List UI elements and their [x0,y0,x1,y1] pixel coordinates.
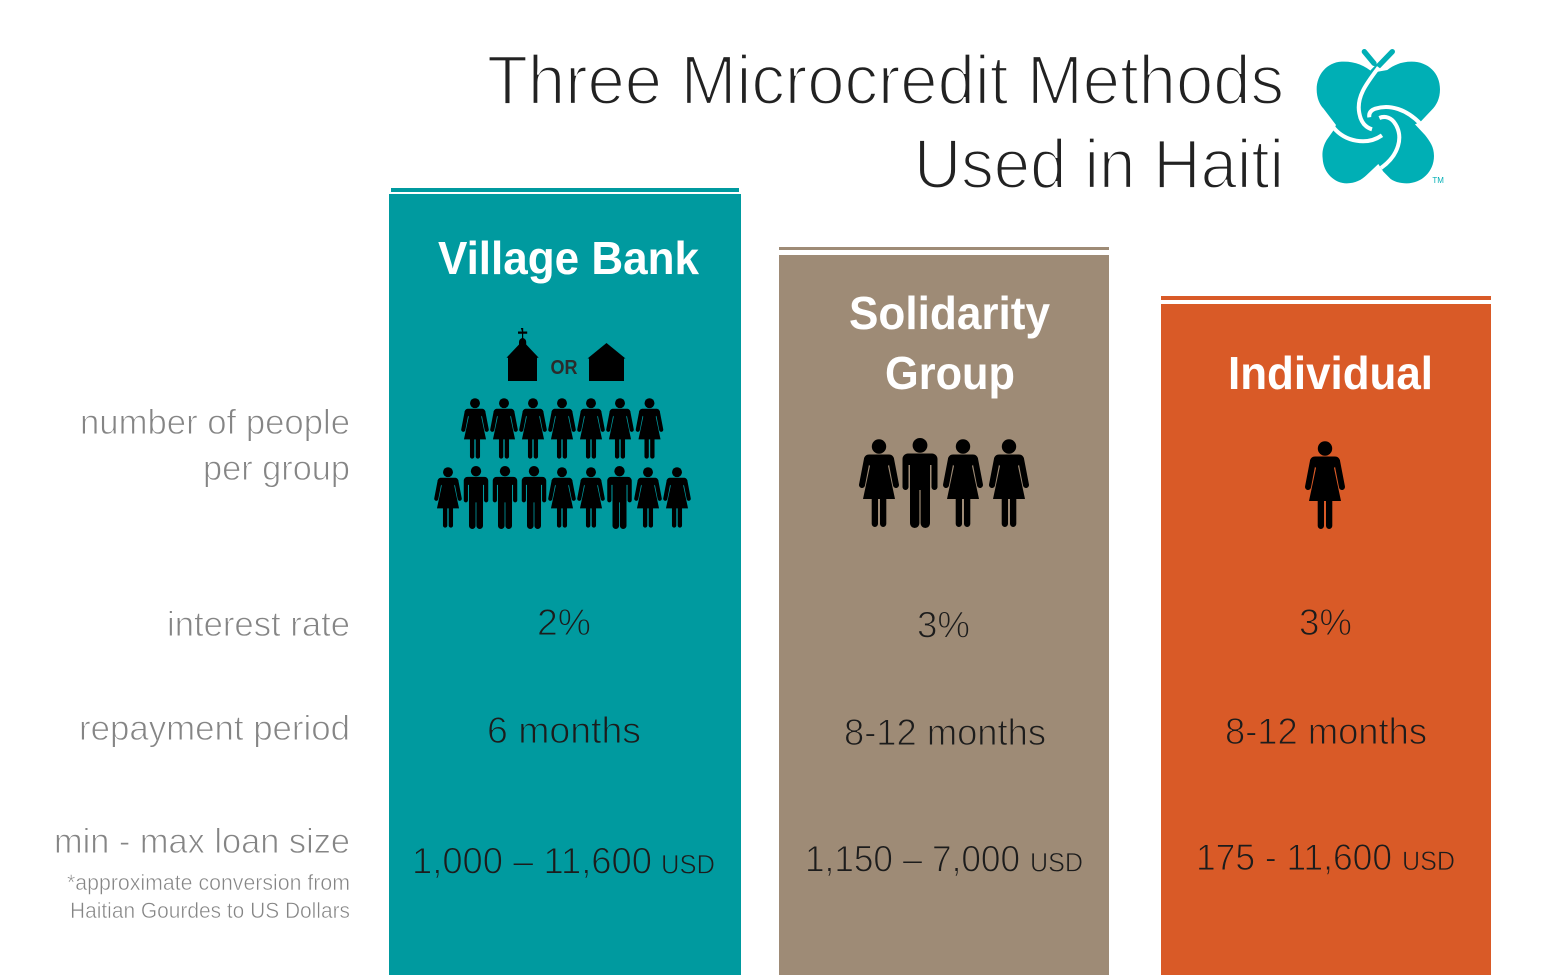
heading: Solidarity Group [849,287,1050,399]
value: repayment period: 8-12 months [844,712,1046,753]
value: loan size: USD [1030,848,1083,878]
people: top row of seven women [463,398,661,459]
person: one woman [1308,441,1342,529]
icon: house [588,343,626,381]
value: loan size: 175 - 11,600 [1196,837,1392,878]
label: repayment period: repayment period [79,709,350,748]
heading: Village Bank: Village Bank [438,232,699,284]
footnote: Haitian Gourdes to US Dollars [70,898,350,923]
value: interest rate: 3% [1299,602,1352,643]
people: bottom row of women and men [436,466,689,529]
text: OR: OR [550,357,578,379]
value: loan size: 1,000 – 11,600 [412,840,652,882]
value: interest rate: 3% [917,604,970,646]
title: Three Microcredit Methods [487,41,1284,119]
row labels [54,403,350,923]
footnote [67,870,350,923]
value: loan size: 1,150 – 7,000 [805,838,1020,880]
value: interest rate: 2% [537,602,591,643]
value: loan size: USD [661,850,715,880]
panel: Village Bank [389,188,741,975]
title: Used in Haiti [914,125,1284,203]
icon: logo: TM [1432,176,1444,185]
value: repayment period: 6 months [487,710,641,751]
label: interest rate: interest rate [167,605,350,644]
heading: Solidarity Group: Solidarity [849,287,1050,339]
label: number of people per group: number of people [80,403,350,442]
heading: Individual: Individual [1228,347,1433,399]
label: number of people per group: per group [203,449,350,488]
people: three women and one man [862,438,1026,528]
heading: Solidarity Group: Group [885,347,1015,399]
footnote: *approximate conversion from [67,870,350,895]
panel: Solidarity Group [779,247,1109,975]
panel: Individual [1161,296,1491,975]
label: number of people per group [80,403,350,488]
icon: church [506,328,539,381]
icon: logo [1317,52,1444,185]
value: loan size: USD [1402,846,1455,876]
label: min - max loan size: min - max loan size [54,822,350,861]
value: repayment period: 8-12 months [1225,711,1427,752]
title [487,41,1284,203]
